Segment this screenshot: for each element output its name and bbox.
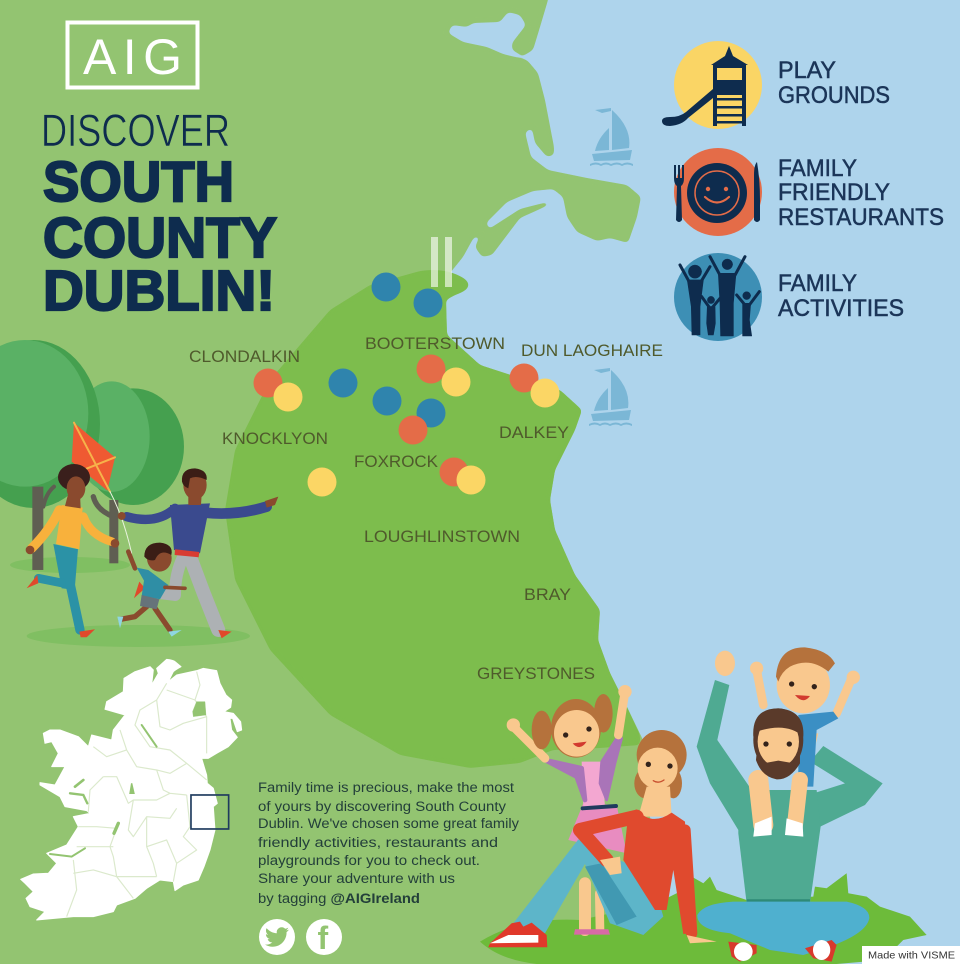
label: family activities: FAMILY [778, 270, 857, 297]
icon: sailboat south [589, 368, 632, 426]
map place names: GREYSTONES [477, 664, 595, 683]
icon: family silhouette [674, 253, 762, 341]
title: DISCOVER [41, 105, 230, 156]
map markers: blue activities [328, 272, 446, 428]
legend: family friendly restaurants [674, 148, 944, 236]
map place names: KNOCKLYON [222, 429, 328, 448]
map place names: LOUGHLINSTOWN [364, 527, 520, 546]
father [697, 651, 883, 962]
Ireland map [21, 659, 242, 920]
ground shadows [10, 557, 250, 647]
man [118, 468, 278, 638]
label: play grounds: GROUNDS [778, 82, 890, 109]
title: SOUTH [43, 150, 234, 214]
body text: playgrounds for you to check out. [258, 853, 480, 868]
icon: facebook: f [318, 920, 328, 956]
body text [258, 780, 519, 906]
label: family friendly restaurants: FAMILY [778, 155, 857, 182]
label: family activities [778, 270, 904, 322]
label: family friendly restaurants [778, 155, 944, 231]
label: play grounds: PLAY [778, 57, 836, 84]
label: family friendly restaurants: RESTAURANTS [778, 204, 944, 231]
girl [507, 685, 632, 935]
legend: family activities [674, 253, 904, 341]
father head [753, 708, 803, 779]
title: DUBLIN! [43, 259, 275, 323]
label: family activities: ACTIVITIES [778, 295, 904, 322]
illustration: trees and kite family [0, 340, 278, 647]
map place names: CLONDALKIN [189, 347, 300, 366]
map place names: DUN LAOGHAIRE [521, 341, 663, 360]
watermark: made with visme: Made with VISME [868, 950, 955, 962]
watermark: made with visme [862, 946, 960, 964]
map place names: BRAY [524, 585, 571, 604]
icon: sailboat north [590, 108, 633, 166]
loughs and estuaries [50, 702, 206, 857]
trees [0, 340, 184, 570]
label: play grounds [778, 57, 890, 109]
icon: twitter [259, 919, 295, 955]
map place names: BOOTERSTOWN [365, 334, 505, 353]
boy [117, 543, 185, 637]
boy on shoulders [750, 662, 860, 837]
legend: playgrounds [662, 41, 890, 129]
map markers: orange restaurants [254, 354, 538, 486]
county borders [67, 672, 207, 917]
body text: Share your adventure with us [258, 871, 455, 886]
map place names: DALKEY [499, 423, 569, 442]
mother [488, 730, 717, 947]
icon: plate with smile [674, 148, 762, 236]
icon: chimneys [431, 237, 452, 287]
map place names [189, 334, 663, 683]
label: family friendly restaurants: FRIENDLY [778, 179, 890, 206]
Ireland outline [21, 659, 242, 920]
illustration: family on grass [480, 647, 927, 964]
grass [480, 873, 927, 964]
map: South County Dublin region [225, 270, 640, 768]
body text: Dublin. We've chosen some great family [258, 816, 519, 831]
icon: playground slide [662, 41, 762, 129]
body text: of yours by discovering South County [258, 799, 506, 814]
map: coastline land [0, 0, 675, 964]
icon: facebook [306, 919, 342, 956]
body text: by tagging @AIGIreland [258, 891, 420, 906]
boy head [776, 647, 835, 713]
body text: Family time is precious, make the most [258, 780, 514, 795]
title: COUNTY [43, 206, 277, 270]
title [41, 105, 277, 323]
logo: AIG: AIG [83, 29, 182, 85]
logo: AIG [68, 22, 198, 88]
locator box [191, 795, 229, 829]
map markers: yellow playgrounds [274, 368, 560, 496]
kite [72, 423, 132, 553]
woman [26, 464, 119, 637]
map place names: FOXROCK [354, 452, 439, 471]
body text: friendly activities, restaurants and [258, 835, 498, 850]
